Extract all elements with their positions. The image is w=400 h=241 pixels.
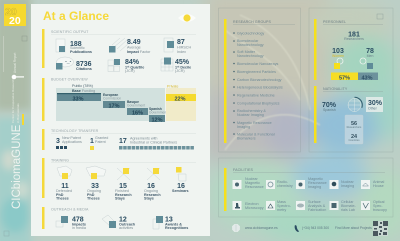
- bar: european commission: European: [103, 93, 118, 97]
- facility: mri: Imaging: [308, 185, 321, 189]
- year badge: 20: [5, 6, 17, 18]
- metric: first quartile: 1: [125, 66, 127, 70]
- metric: awards: Awards &: [165, 222, 182, 226]
- title: At a Glance: [43, 9, 109, 23]
- sidebar divider: [2, 36, 5, 72]
- facility: nmr: Nuclear: [245, 177, 258, 181]
- panel: facilities: [218, 158, 393, 217]
- budget chart: public: Base Funding: [72, 89, 95, 93]
- panel: research groups: [218, 8, 300, 152]
- bar: european commission: Commission: [103, 96, 121, 100]
- metric: citations: [56, 57, 92, 71]
- facility: radiochemistry: [266, 180, 293, 189]
- metric: ongoing theses: 33: [91, 183, 99, 190]
- list of research groups: Magnetic Resonance: [237, 121, 272, 125]
- metric: seminars: 16: [177, 183, 185, 190]
- metric: defended theses: Defended: [56, 189, 72, 193]
- report subtitle: Annual Report: [13, 53, 17, 73]
- other nationalities: Other: [368, 106, 378, 110]
- section: technology transfer: TECHNOLOGY TRANSFER: [51, 129, 99, 133]
- bar: basque government: Government: [127, 104, 145, 108]
- facility: nmr: Magnetic: [245, 181, 260, 185]
- men count: Men: [367, 54, 373, 58]
- gender bar: [331, 72, 378, 82]
- bar: european commission: [103, 93, 125, 110]
- metric: defended theses: PhD: [56, 193, 64, 197]
- left white panel: [31, 4, 210, 236]
- list of research groups: Nuclear Imaging: [237, 113, 264, 117]
- section: scientific output: SCIENTIFIC OUTPUT: [51, 30, 89, 34]
- panel: personnel and nationality frame: [309, 8, 393, 152]
- budget chart: public: Public (78%): [72, 84, 93, 88]
- facility: surface analysis: Analysis &: [308, 204, 326, 208]
- bar: spanish government: Government: [149, 110, 167, 114]
- countries box: Researchers: [347, 125, 362, 129]
- metric: ongoing research stays: Ongoing: [144, 189, 158, 193]
- facility: optical spectroscopy: Optical: [373, 200, 385, 204]
- facility: cellular biomaterials: Biomate-: [341, 204, 357, 208]
- facility: optical spectroscopy: [361, 200, 387, 212]
- background arcs: [225, 15, 320, 150]
- metric: hirsch index: 87: [177, 39, 185, 46]
- metric: awards: 13: [165, 216, 173, 224]
- organisation name: CICbiomaGUNE: [11, 124, 23, 209]
- facility: cellular biomaterials: rials Lab: [341, 208, 355, 212]
- list of research groups: Biomarkers: [237, 136, 256, 140]
- metric: first decile: (JCR): [175, 69, 185, 73]
- women count: 103: [332, 48, 344, 55]
- metric: ongoing research stays: Stays: [144, 196, 154, 200]
- section: outreach and media: [42, 207, 188, 230]
- gender bar: 57%: [339, 76, 350, 82]
- countries box: Countries: [348, 138, 360, 142]
- metric: ongoing theses: Ongoing: [87, 189, 101, 193]
- list of research groups: Radiochemistry &: [237, 109, 266, 113]
- bar: base funding: 33%: [72, 96, 84, 102]
- facility: nmr: Resonance: [245, 185, 264, 189]
- facility: nmr: [232, 177, 264, 189]
- list of research groups: Nanotechnology: [237, 43, 264, 47]
- facility: radiochemistry: chemistry: [277, 184, 293, 188]
- countries box: 24: [351, 134, 358, 140]
- metric: impacts in media: [56, 216, 87, 230]
- metric: outreach activities: [102, 215, 136, 230]
- metric: finished research stays: [115, 168, 132, 200]
- metric: impacts in media: 478: [72, 216, 84, 224]
- metric: finished research stays: Stays: [115, 196, 125, 200]
- list of research groups: Biomolecular Nanoarrays: [237, 62, 279, 66]
- year badge: 20: [9, 15, 21, 27]
- metric: impact factor: Average: [127, 46, 141, 50]
- metric: agreements: 17: [119, 138, 127, 145]
- facility: cellular biomaterials: Cellular: [341, 200, 354, 204]
- project link: Find More about Projects →: [335, 226, 376, 230]
- metric: patent applications: Applications: [62, 140, 82, 144]
- bar: spanish government: 12%: [151, 118, 163, 124]
- sidebar: [4, 4, 27, 236]
- men count: 78: [366, 48, 374, 55]
- phone number: (+34) 943 005 300: [302, 226, 329, 230]
- facility: electron microscopy: Electron: [245, 202, 259, 206]
- small bottom square: [4, 231, 9, 236]
- sidebar accent: [22, 114, 24, 125]
- metric: first decile: 1: [175, 66, 177, 70]
- metric: ongoing theses: [86, 166, 106, 200]
- year badge: [4, 4, 26, 27]
- metric: hirsch index: [164, 38, 191, 54]
- facility: optical spectroscopy: troscopy: [373, 208, 387, 212]
- list of research groups: Biomolecular: [237, 39, 259, 43]
- metric: citations: "...": [65, 60, 72, 64]
- total personnel: Researchers: [344, 37, 364, 41]
- facility: surface analysis: Fabrication: [308, 208, 326, 212]
- bar: basque government: Basque: [127, 100, 139, 104]
- facility: surface analysis: [296, 200, 326, 212]
- section: budget overview: [42, 78, 196, 124]
- personnel: [314, 14, 383, 82]
- spanish share: 70%: [322, 102, 337, 109]
- metric: citations: Citations: [76, 67, 92, 71]
- footer: [232, 221, 388, 236]
- spanish share: Spanish: [323, 108, 336, 112]
- budget chart: public: [56, 84, 167, 124]
- personnel: PERSONNEL: [323, 20, 346, 24]
- total personnel: 181: [348, 32, 360, 38]
- nationality: NATIONALITY: [323, 87, 348, 91]
- metric: ongoing theses: Theses: [87, 196, 100, 200]
- facility: nuclear imaging: Imaging: [341, 184, 354, 188]
- facility: electron microscopy: Microscopy: [245, 206, 264, 210]
- metric: defended theses: Theses: [56, 196, 69, 200]
- metric: first decile: [161, 58, 191, 73]
- small square outline: [22, 36, 27, 41]
- women count: [332, 48, 344, 69]
- countries box: [345, 115, 363, 144]
- section: scientific output: [42, 29, 196, 73]
- metric: first quartile: (JCR): [125, 69, 135, 73]
- globe donut: [347, 97, 362, 113]
- metric: patent applications: 3: [56, 138, 60, 145]
- budget chart: private: Private: [167, 84, 178, 88]
- list of research groups: Computational Biophysics: [237, 102, 280, 106]
- gender bar: 43%: [361, 76, 373, 82]
- section: outreach and media: OUTREACH & MEDIA: [51, 208, 89, 212]
- facility: mri: Resonance: [308, 181, 327, 185]
- metric: patent applications: New Patent: [62, 136, 81, 140]
- metric: defended theses: [56, 166, 72, 200]
- metric: outreach activities: Outreach: [119, 222, 136, 226]
- metric: hirsch index: HIRSCH: [177, 46, 191, 50]
- nationality: [314, 86, 383, 144]
- icon: eye: [178, 14, 196, 22]
- metric: agreements: [119, 136, 194, 150]
- list of research groups: Carbon Bionanotechnology: [237, 78, 282, 82]
- women count: Women: [332, 54, 344, 58]
- bar: european commission: 17%: [108, 104, 120, 110]
- icon: globe: [232, 224, 240, 232]
- facility: animal house: House: [373, 184, 384, 188]
- metric: granted patent: Granted: [95, 136, 108, 140]
- website: www.cicbiomagune.es: [245, 226, 278, 230]
- list of research groups: Glycotechnology: [237, 31, 264, 35]
- metric: impact factor: Impact Factor: [127, 50, 151, 54]
- metric: seminars: Seminars: [172, 189, 189, 193]
- list of research groups: Nanotechnology: [237, 54, 264, 58]
- list of research groups: Imaging: [237, 125, 250, 129]
- metric: finished research stays: 15: [119, 183, 127, 190]
- section: training: TRAINING: [51, 158, 69, 162]
- section: budget overview: BUDGET OVERVIEW: [51, 78, 88, 82]
- metric: granted patent: 1: [90, 138, 94, 145]
- metric: outreach activities: 12: [119, 216, 127, 224]
- total personnel: [344, 32, 364, 41]
- metric: impact factor: [109, 38, 151, 54]
- list of research groups: Regenerative Medicine: [237, 94, 275, 98]
- men count: [360, 48, 374, 69]
- facility: mass spectrometry: [266, 200, 292, 212]
- metric: first quartile: st: [127, 66, 129, 68]
- metric: outreach activities: activities: [119, 226, 133, 230]
- facility: radiochemistry: Radio-: [277, 180, 289, 184]
- metric: agreements: Industrial or Clinical Partners: [130, 140, 177, 144]
- icon: phone: [295, 225, 299, 232]
- organisation note: in Biomaterials: [16, 103, 20, 123]
- metric: hirsch index: Index: [177, 50, 186, 54]
- facility: surface analysis: Surface: [308, 200, 321, 204]
- facility: nuclear imaging: Nuclear: [341, 180, 354, 184]
- metric: first quartile: [108, 59, 144, 73]
- qr code: [373, 221, 388, 236]
- metric: first quartile: Quartile: [129, 66, 144, 70]
- metric: granted patent: [90, 136, 108, 150]
- countries box: 56: [351, 121, 357, 127]
- metric: granted patent: Patent: [95, 140, 106, 144]
- facility: mass spectrometry: Spectro-: [277, 204, 292, 208]
- metric: awards: Recognitions: [165, 226, 188, 230]
- metric: impacts in media: Impacts: [72, 222, 86, 226]
- organisation subtitle: Center for Cooperative Research: [11, 79, 15, 123]
- metric: first decile: st: [177, 66, 179, 68]
- other nationalities: [366, 97, 383, 112]
- metric: citations: 8736: [76, 61, 92, 68]
- facility: cellular biomaterials: [330, 200, 357, 212]
- facility: electron microscopy: [232, 201, 264, 210]
- metric: ongoing research stays: 16: [147, 183, 155, 190]
- metric: publications: Scientific: [70, 46, 85, 50]
- other nationalities: 30%: [368, 100, 383, 107]
- facility: nuclear imaging: [330, 180, 354, 189]
- panel: facilities: FACILITIES: [233, 168, 253, 172]
- metric: seminars: [172, 167, 189, 193]
- metric: publications: [56, 39, 92, 54]
- budget chart: private: [166, 84, 196, 121]
- metric: impacts in media: in media: [72, 226, 87, 230]
- key icon: [12, 75, 24, 79]
- list of research groups: Soft Matter: [237, 50, 256, 54]
- metric: ongoing theses: PhD: [87, 193, 95, 197]
- facility: animal house: Animal: [373, 180, 384, 184]
- metric: defended theses: 11: [61, 183, 69, 190]
- metric: finished research stays: Finished: [115, 189, 129, 193]
- bar: spanish government: [149, 107, 167, 124]
- metric: first decile: Decile: [179, 66, 191, 70]
- metric: ongoing research stays: Research: [144, 193, 161, 197]
- facility: mass spectrometry: metry: [277, 208, 286, 212]
- metric: impact factor: 8.49: [127, 39, 141, 46]
- metric: agreements: Agreements with: [130, 136, 157, 140]
- facility: optical spectroscopy: Spec-: [373, 204, 383, 208]
- panel: research groups: RESEARCH GROUPS: [233, 20, 272, 24]
- facility: mri: Magnetic: [308, 177, 323, 181]
- metric: publications: Publications: [70, 50, 92, 54]
- bar: basque government: [127, 100, 148, 116]
- spanish share: [322, 102, 337, 112]
- bar: spanish government: Spanish: [149, 107, 162, 111]
- facility: animal house: [361, 180, 384, 189]
- metric: finished research stays: Research: [115, 193, 132, 197]
- budget chart: private: 22%: [174, 96, 186, 102]
- metric: publications: 188: [70, 41, 82, 48]
- metric: awards: [153, 216, 188, 230]
- section: training: [42, 158, 196, 200]
- metric: first quartile: 84%: [125, 59, 140, 66]
- facility: mri: [296, 177, 327, 189]
- metric: patent applications: [56, 136, 82, 149]
- metric: first decile: 45%: [175, 59, 190, 66]
- bar: basque government: 16%: [132, 110, 143, 116]
- section: technology transfer: [42, 129, 196, 150]
- metric: ongoing research stays: [144, 168, 161, 200]
- list of research groups: Bioengineered Particles: [237, 70, 276, 74]
- list of research groups: Molecular & Functional: [237, 132, 275, 136]
- list of research groups: [233, 31, 283, 140]
- list of research groups: Heterogeneous Biocatalysis: [237, 86, 283, 90]
- facility: mass spectrometry: Mass: [277, 200, 286, 204]
